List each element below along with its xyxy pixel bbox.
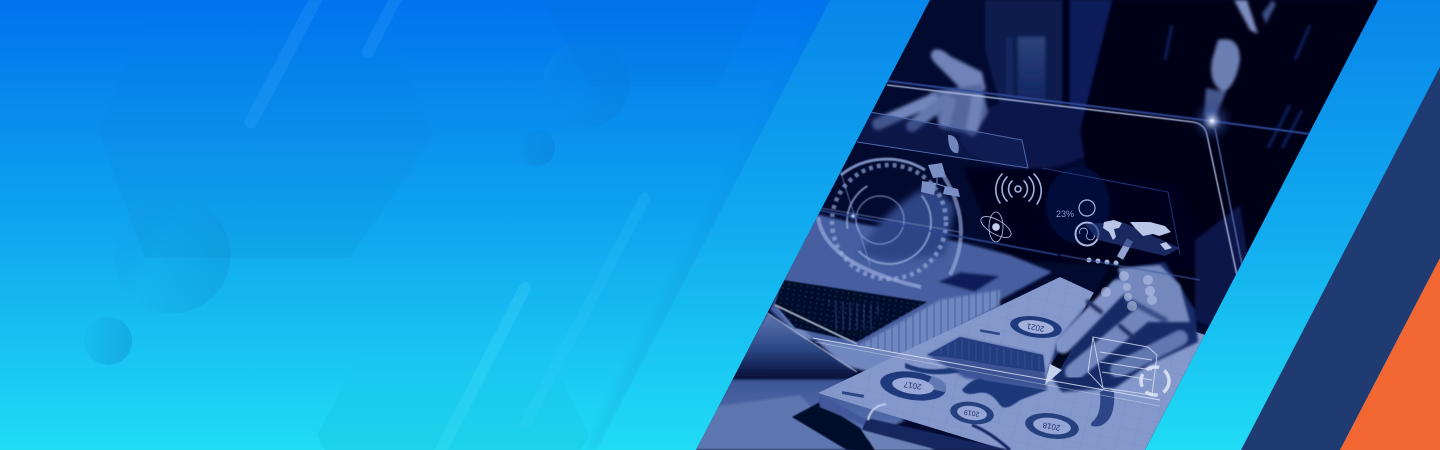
person: suit and hair	[960, 0, 1390, 330]
atom icon	[980, 212, 1012, 242]
small chart labels	[842, 329, 1000, 398]
dashed ring icon	[1141, 367, 1169, 395]
report paper	[818, 277, 1205, 450]
decorative spheres	[84, 40, 630, 365]
glass panel	[857, 112, 1028, 168]
hair highlights	[1046, 0, 1310, 335]
donut charts: 2021	[1025, 321, 1045, 333]
photo: person using analytics dashboard	[690, 0, 1390, 450]
dashboard widgets: 23%	[1056, 209, 1074, 219]
small flare on target	[848, 210, 859, 222]
light blue diagonal stripe: right	[1143, 0, 1440, 450]
orange diagonal stripe	[1340, 258, 1440, 450]
keypad numbers on hand	[1101, 271, 1157, 311]
pen	[1045, 240, 1130, 385]
decorative hexagon: lower middle	[317, 350, 589, 450]
clipboard shadow and binder	[792, 393, 1010, 450]
decorative pills	[251, 0, 645, 450]
donut charts	[878, 313, 1080, 442]
network icon	[921, 163, 960, 197]
tall drop bar	[1091, 388, 1114, 426]
navy diagonal stripe	[1241, 67, 1440, 450]
donut charts: 2017	[903, 380, 922, 391]
world map widget	[1085, 220, 1180, 256]
stripe shadow	[585, 0, 830, 450]
hatched bar chart	[860, 287, 1000, 354]
laptop keyboard	[767, 280, 927, 372]
light blue diagonal stripe: left	[597, 0, 932, 450]
light flare on glass frame	[1192, 104, 1232, 140]
pointing hand	[878, 49, 988, 135]
wave area chart	[962, 379, 1047, 408]
shadow under writing hand	[1048, 262, 1198, 392]
HUD lines	[818, 80, 1310, 285]
isometric box	[1088, 337, 1157, 395]
dashboard widgets	[1042, 168, 1180, 266]
HUD target rings	[818, 159, 961, 287]
lower frame line	[813, 338, 1160, 406]
decorative hexagon: upper right	[542, 0, 760, 87]
donut charts: 2019	[963, 408, 980, 417]
donut charts: 2018	[1041, 420, 1061, 432]
decorative hexagon: upper left	[98, 0, 434, 258]
writing hand	[1063, 265, 1190, 372]
wifi signal icon	[996, 174, 1041, 204]
desk and laptop area	[690, 213, 1052, 450]
